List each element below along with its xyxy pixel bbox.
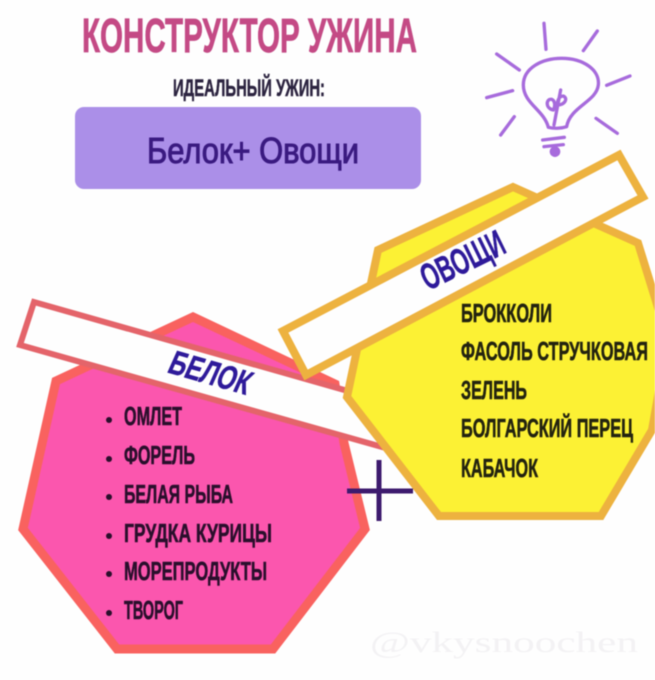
vegetables label band bbox=[283, 155, 643, 375]
protein list: МОРЕПРОДУКТЫ bbox=[124, 556, 267, 586]
protein list: ФОРЕЛЬ bbox=[124, 440, 195, 470]
yellow polygon bbox=[347, 187, 655, 516]
formula box bbox=[75, 107, 421, 189]
pink heptagon bbox=[23, 317, 365, 649]
formula text: Белок+ Овощи bbox=[147, 130, 359, 171]
protein list: ТВОРОГ bbox=[124, 595, 183, 625]
vegetables list: КАБАЧОК bbox=[461, 453, 538, 483]
vegetables list: БРОККОЛИ bbox=[461, 298, 552, 328]
panel: vegetables bbox=[283, 155, 655, 516]
icon: plus sign bbox=[347, 460, 413, 521]
protein list: ОМЛЕТ bbox=[124, 401, 182, 431]
protein label band bbox=[20, 302, 415, 452]
title: КОНСТРУКТОР УЖИНА bbox=[82, 10, 417, 63]
vegetables list bbox=[461, 298, 648, 483]
subtitle: ИДЕАЛЬНЫЙ УЖИН: bbox=[173, 74, 325, 102]
box background bbox=[75, 107, 421, 189]
vegetables list: ЗЕЛЕНЬ bbox=[461, 375, 527, 405]
protein list: БЕЛАЯ РЫБА bbox=[124, 479, 233, 509]
icon: light bulb bbox=[487, 23, 630, 155]
protein heading: БЕЛОК bbox=[163, 344, 258, 402]
vegetables heading: ОВОЩИ bbox=[414, 222, 511, 298]
protein list: ГРУДКА КУРИЦЫ bbox=[124, 518, 272, 548]
panel: protein bbox=[20, 302, 415, 649]
watermark: @vkysnoochen bbox=[370, 626, 638, 659]
protein list bbox=[106, 401, 272, 625]
